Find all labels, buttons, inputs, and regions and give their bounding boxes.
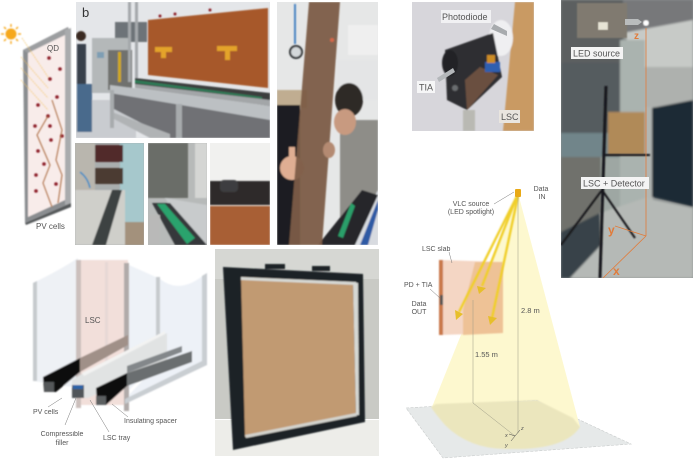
photo: person holding LSC slab: [277, 2, 378, 245]
photo: green roller: [148, 143, 207, 245]
glass panes: [33, 258, 78, 388]
label: PD + TIA: PD + TIA: [404, 282, 433, 289]
label: 2.8 m: 2.8 m: [521, 306, 540, 315]
axis labels: z: [634, 31, 639, 42]
LSC slab: [439, 260, 503, 335]
tray: [72, 333, 167, 398]
tall LSC slab: [289, 2, 340, 245]
label: QD: QD: [47, 44, 59, 53]
label: LSC + Detector: LSC + Detector: [583, 178, 645, 188]
operator: [77, 44, 86, 84]
axis letters: [504, 426, 524, 449]
axis labels: y: [608, 223, 615, 237]
LED spotlight: [515, 189, 521, 197]
photo: detector on slab: [210, 143, 270, 245]
light cone: [432, 193, 580, 427]
floor plane: [406, 400, 631, 458]
coordinate axes: [603, 28, 646, 278]
label: Photodiode: Photodiode: [442, 12, 488, 22]
sun rays: [21, 38, 50, 110]
label: LSC: LSC: [501, 112, 519, 122]
axis letters: x: [504, 433, 508, 439]
photo: framed LSC window: [215, 249, 379, 456]
panel: LSC window schematic with sun: [1, 24, 71, 231]
label: Data OUT: Data: [412, 301, 426, 308]
window frame: [23, 27, 71, 225]
measurement lines: [430, 192, 518, 436]
label: Data OUT: OUT: [412, 309, 427, 316]
label: LSC slab: LSC slab: [422, 246, 451, 253]
axes marker: [509, 430, 520, 441]
callout leader lines: [48, 398, 128, 432]
label: b: b: [82, 5, 89, 20]
machine frame underside: [112, 90, 270, 138]
arrow: to TIA: [437, 68, 455, 82]
arrow heads: [455, 286, 497, 325]
light footprint: [431, 400, 580, 449]
label: VLC source: VLC source: [453, 201, 489, 208]
arrow: to LED: [625, 19, 642, 25]
label: Insulating spacer: Insulating spacer: [124, 418, 178, 425]
label: Compressible filler: filler: [56, 440, 69, 447]
label: LED source: LED source: [573, 48, 620, 58]
right PV channel: [96, 373, 127, 405]
label: TIA: TIA: [419, 82, 433, 92]
panel: VLC experiment diagram: [404, 186, 631, 458]
label: PV cells: PV cells: [33, 409, 59, 416]
panel b: production line photo: [76, 2, 270, 138]
light paths: [37, 100, 62, 207]
arrow: to photodiode: [491, 24, 507, 36]
label: Compressible filler: Compressible: [41, 431, 83, 438]
axis labels: [608, 31, 639, 278]
panel: lab measurement setup photo: [561, 0, 693, 278]
label: PV cells: PV cells: [36, 222, 65, 231]
axis letters: y: [504, 443, 509, 449]
photo: nozzle assembly: [75, 143, 144, 245]
label: VLC source: (LED spotlight): [448, 209, 494, 216]
left PV channel: [43, 358, 80, 392]
panel: window cross-section diagram: [33, 258, 207, 447]
machine table: [110, 85, 270, 120]
label: Data IN: IN: [538, 194, 546, 201]
label: 1.55 m: 1.55 m: [475, 350, 498, 359]
panel: detector close-up photo: [412, 2, 534, 131]
label: Data IN: Data: [534, 186, 548, 193]
quantum dots: [33, 56, 64, 193]
axis labels: x: [613, 264, 620, 278]
label: LSC tray: LSC tray: [103, 435, 131, 442]
yellow light arrows: [459, 196, 518, 318]
axis letters: z: [520, 426, 524, 432]
label: LSC: LSC: [85, 316, 101, 325]
copper LSC slab: [148, 8, 268, 88]
icon: sun: [1, 24, 21, 44]
tripod: [561, 86, 650, 278]
